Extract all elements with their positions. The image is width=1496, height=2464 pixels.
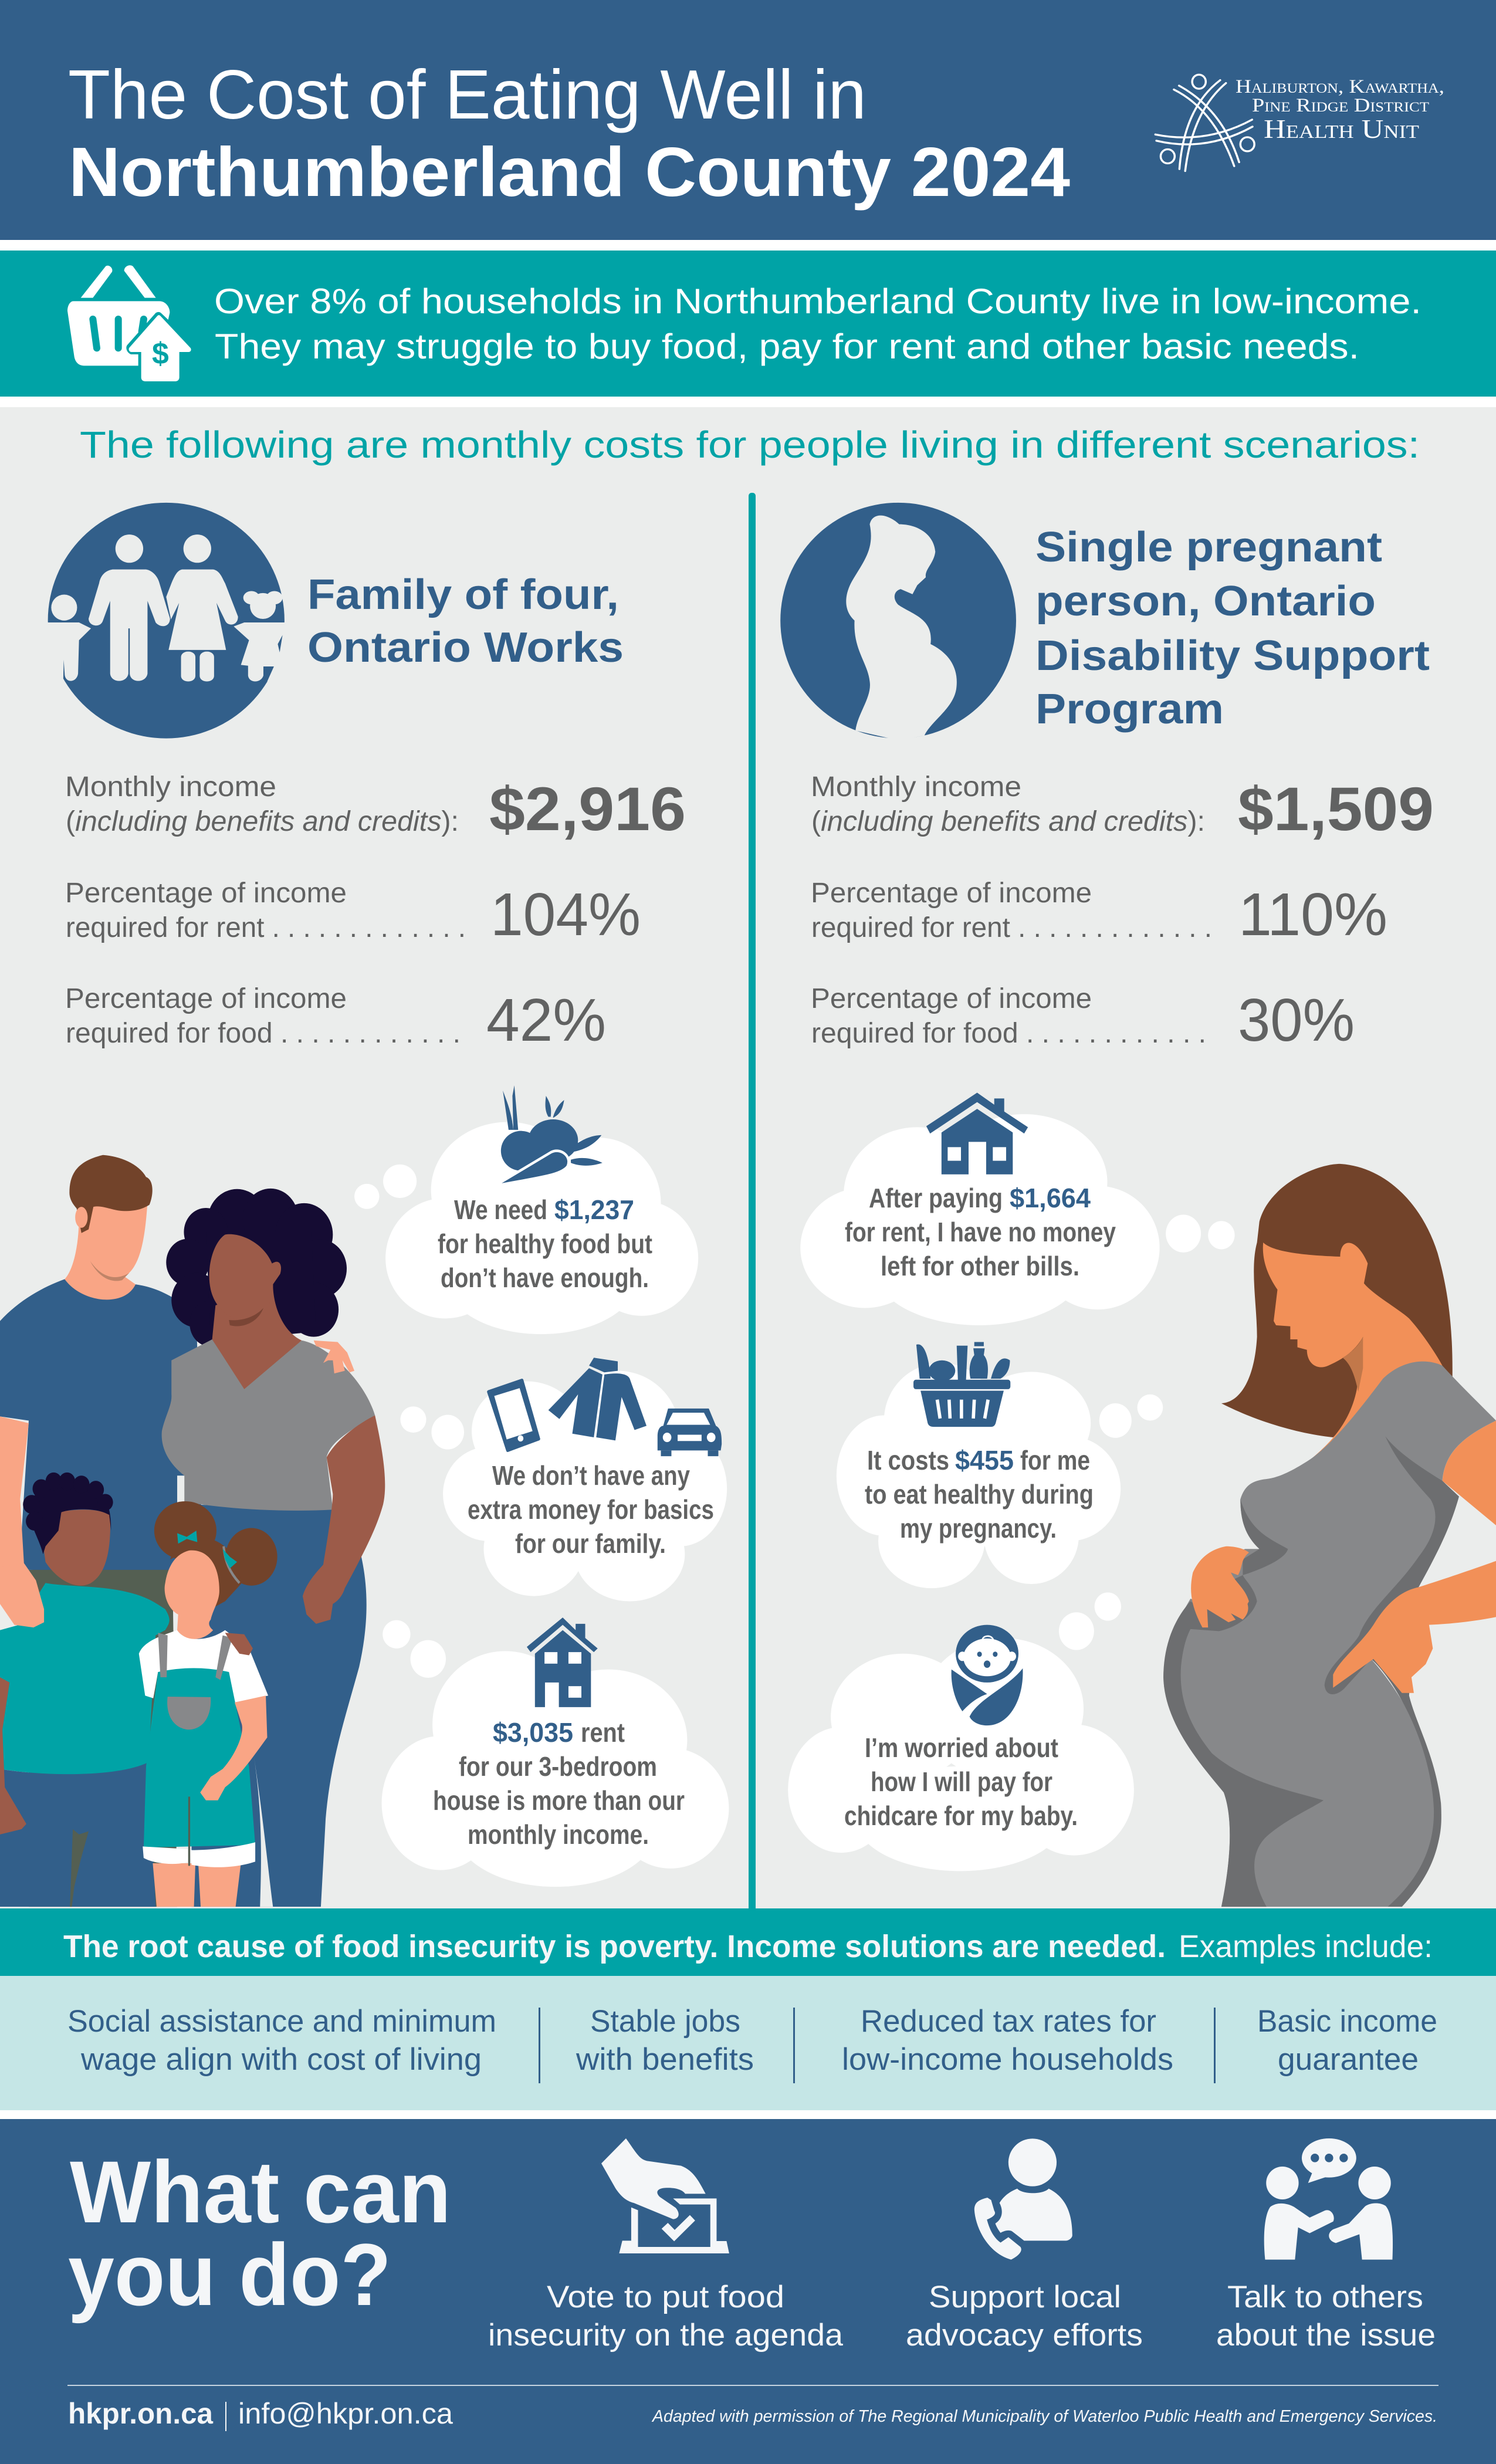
root cause banner: The root cause of food insecurity is poverty. Income solutions are needed. bbox=[63, 1929, 1166, 1964]
action: support advocacy: advocacy efforts bbox=[906, 2318, 1143, 2353]
stat: rent share: required for rent . . . . . . . . . . . . . bbox=[811, 912, 1212, 943]
action: vote: Vote to put food bbox=[547, 2280, 784, 2314]
thought bubble: rent bbox=[382, 1617, 729, 1887]
bubble text: We don’t have any bbox=[492, 1460, 690, 1491]
bubble text: After paying bbox=[869, 1183, 1003, 1213]
boy bbox=[0, 1473, 170, 1907]
stat: rent share: Percentage of income bbox=[65, 878, 347, 909]
grey scenario background bbox=[0, 407, 1496, 1909]
heading: person, Ontario bbox=[1035, 578, 1376, 625]
heading: What can bbox=[70, 2143, 451, 2241]
heading: Single pregnant bbox=[1035, 524, 1382, 571]
icon: grocery basket bbox=[913, 1342, 1010, 1427]
bubble text: $1,664 bbox=[1010, 1183, 1091, 1213]
heading: Ontario Works bbox=[307, 624, 624, 671]
panel: family of four bbox=[43, 503, 686, 1054]
logo: health unit: Pine Ridge District bbox=[1252, 95, 1429, 116]
action: talk to others: about the issue bbox=[1216, 2318, 1436, 2353]
bubble text: my pregnancy. bbox=[900, 1513, 1057, 1544]
stat: rent share bbox=[65, 878, 641, 948]
action: support advocacy: Support local bbox=[929, 2280, 1121, 2314]
solution: stable jobs bbox=[576, 2004, 754, 2077]
banner text: Over 8% of households in Northumberland County live in low-income. bbox=[214, 282, 1421, 321]
root cause banner: Examples include: bbox=[1179, 1929, 1433, 1964]
action: vote: insecurity on the agenda bbox=[488, 2318, 844, 2353]
thought bubble: after rent bbox=[800, 1093, 1235, 1325]
attribution: Adapted with permission of The Regional Municipality of Waterloo Public Health and Emergency Services. bbox=[651, 2407, 1437, 2426]
title: The Cost of Eating Well in bbox=[68, 56, 867, 134]
heading: Disability Support bbox=[1035, 632, 1430, 679]
icon: ballot box bbox=[601, 2138, 729, 2253]
bubble text bbox=[845, 1183, 1116, 1281]
footer contacts: hkpr.on.ca bbox=[68, 2397, 214, 2430]
icon: house bbox=[926, 1093, 1028, 1175]
thought bubble: basics bbox=[400, 1358, 727, 1602]
icon: pregnant silhouette circle bbox=[780, 503, 1016, 740]
banner text: They may struggle to buy food, pay for rent and other basic needs. bbox=[215, 327, 1359, 366]
heading: Family of four, bbox=[307, 571, 619, 618]
stat: food share: 42% bbox=[486, 986, 606, 1054]
solution: stable jobs: Stable jobs bbox=[590, 2004, 740, 2039]
subheading: The following are monthly costs for people living in different scenarios: bbox=[80, 424, 1420, 466]
stat: rent share bbox=[811, 878, 1387, 948]
solution: social assistance bbox=[67, 2004, 496, 2077]
icon: person on phone bbox=[974, 2138, 1072, 2260]
bubble text: for our family. bbox=[515, 1528, 666, 1559]
centre divider bbox=[749, 493, 756, 1913]
icon: shopping basket with dollar house bbox=[67, 265, 191, 381]
forearm and hand on back bbox=[1333, 1561, 1496, 1693]
icon: phone bbox=[489, 1380, 539, 1450]
neck shadow bbox=[1342, 1337, 1363, 1392]
stat: monthly income: (including benefits and credits): bbox=[811, 806, 1205, 837]
action: talk to others bbox=[1216, 2280, 1436, 2353]
bubble text bbox=[844, 1732, 1078, 1831]
action: vote bbox=[488, 2280, 844, 2353]
stat: monthly income bbox=[811, 771, 1434, 844]
bubble text: $455 bbox=[955, 1445, 1014, 1475]
icon: family circle bbox=[43, 503, 292, 739]
girl bbox=[139, 1501, 277, 1907]
stat: food share bbox=[811, 983, 1355, 1054]
dress bbox=[1163, 1362, 1496, 1907]
footer contacts: info@hkpr.on.ca bbox=[238, 2397, 453, 2430]
icon: two people talking bbox=[1264, 2138, 1393, 2260]
stat: food share: Percentage of income bbox=[811, 983, 1092, 1014]
stat: rent share: 104% bbox=[490, 881, 641, 948]
root cause banner bbox=[0, 1908, 1496, 1976]
stat: monthly income: Monthly income bbox=[811, 771, 1021, 803]
action: talk to others: Talk to others bbox=[1227, 2280, 1423, 2314]
low-income banner bbox=[0, 251, 1496, 397]
bubble text: It costs bbox=[867, 1445, 949, 1475]
bubble text: for our 3-bedroom bbox=[459, 1751, 657, 1782]
heading: you do? bbox=[68, 2225, 391, 2324]
action: support advocacy bbox=[906, 2280, 1143, 2353]
stat: food share: 30% bbox=[1238, 986, 1355, 1054]
hair bbox=[1221, 1164, 1453, 1437]
bubble text bbox=[438, 1194, 652, 1293]
stat: food share: required for food . . . . . . . . . . . . bbox=[811, 1018, 1206, 1049]
solution: basic income: guarantee bbox=[1278, 2042, 1419, 2077]
icon: car bbox=[658, 1409, 722, 1456]
man bbox=[0, 1155, 201, 1907]
stat: food share: Percentage of income bbox=[65, 983, 347, 1014]
solution: stable jobs: with benefits bbox=[576, 2042, 754, 2077]
solution: social assistance: wage align with cost of living bbox=[80, 2042, 482, 2077]
bubble text: chidcare for my baby. bbox=[844, 1800, 1078, 1831]
heading bbox=[68, 2143, 451, 2324]
stat: monthly income: $2,916 bbox=[489, 775, 686, 844]
stat: food share: required for food . . . . . . . . . . . . bbox=[66, 1018, 461, 1049]
icon: vegetables bbox=[495, 1085, 603, 1186]
stat: rent share: required for rent . . . . . . . . . . . . . bbox=[66, 912, 466, 943]
bubble text bbox=[865, 1445, 1094, 1544]
bubble text: left for other bills. bbox=[881, 1251, 1079, 1281]
illustration: pregnant person bbox=[1163, 1164, 1496, 1907]
solution: basic income bbox=[1257, 2004, 1437, 2077]
bubble text: for healthy food but bbox=[438, 1228, 652, 1259]
illustration: family of four bbox=[0, 1155, 385, 1907]
bubble text: $3,035 bbox=[493, 1717, 573, 1748]
panel: single pregnant person bbox=[780, 503, 1434, 1054]
stat: rent share: 110% bbox=[1238, 881, 1387, 948]
bubble text: We need bbox=[454, 1194, 547, 1225]
stat: monthly income bbox=[65, 771, 686, 844]
bubble text: don’t have enough. bbox=[441, 1263, 649, 1293]
logo: health unit: Health Unit bbox=[1264, 114, 1419, 144]
stat: monthly income: Monthly income bbox=[65, 771, 276, 803]
bubble text: for rent, I have no money bbox=[845, 1217, 1116, 1247]
solution: reduced tax rates: low-income households bbox=[842, 2042, 1173, 2077]
bubble text: $1,237 bbox=[554, 1194, 634, 1225]
solution: reduced tax rates: Reduced tax rates for bbox=[861, 2004, 1156, 2039]
solution: basic income: Basic income bbox=[1257, 2004, 1437, 2039]
heading bbox=[307, 571, 624, 671]
stat: monthly income: (including benefits and credits): bbox=[66, 806, 459, 837]
header banner bbox=[0, 0, 1496, 240]
icon: jacket bbox=[549, 1358, 647, 1440]
bubble text: I’m worried about bbox=[865, 1732, 1058, 1763]
income solutions strip bbox=[0, 1976, 1496, 2110]
title: Northumberland County 2024 bbox=[69, 133, 1070, 211]
thought bubble: pregnancy food bbox=[837, 1342, 1163, 1588]
title bbox=[68, 56, 1070, 211]
bubble text: house is more than our bbox=[433, 1785, 685, 1816]
bubble text: extra money for basics bbox=[468, 1494, 714, 1525]
thought bubble: healthy food cost bbox=[354, 1085, 698, 1334]
panel: what can you do bbox=[0, 2119, 1496, 2464]
bubble text: monthly income. bbox=[468, 1819, 649, 1850]
face and chest bbox=[1263, 1243, 1443, 1463]
stat: food share bbox=[65, 983, 606, 1054]
stat: monthly income: $1,509 bbox=[1238, 775, 1434, 844]
hand on belly bbox=[1191, 1546, 1249, 1627]
bubble text: for me bbox=[1020, 1445, 1090, 1475]
stat: rent share: Percentage of income bbox=[811, 878, 1092, 909]
thought bubble: childcare bbox=[788, 1592, 1134, 1871]
logo: health unit bbox=[1155, 75, 1444, 171]
upper arm bbox=[1443, 1420, 1496, 1525]
solution: social assistance: Social assistance and minimum bbox=[67, 2004, 496, 2039]
icon: shopping basket with dollar house: $ bbox=[152, 336, 169, 370]
bubble text: how I will pay for bbox=[871, 1766, 1052, 1797]
logo: health unit: Haliburton, Kawartha, bbox=[1236, 76, 1444, 97]
icon: two-storey house bbox=[527, 1617, 598, 1707]
icon: swaddled baby bbox=[952, 1625, 1023, 1725]
bubble text bbox=[468, 1460, 714, 1559]
banner text bbox=[214, 282, 1421, 366]
bubble text: to eat healthy during bbox=[865, 1479, 1094, 1509]
footer contacts bbox=[68, 2397, 453, 2431]
solution: reduced tax rates bbox=[842, 2004, 1173, 2077]
bubble text bbox=[433, 1717, 685, 1850]
heading: Program bbox=[1035, 686, 1224, 733]
woman bbox=[162, 1189, 385, 1907]
bubble text: rent bbox=[581, 1717, 625, 1748]
heading bbox=[1035, 524, 1430, 733]
